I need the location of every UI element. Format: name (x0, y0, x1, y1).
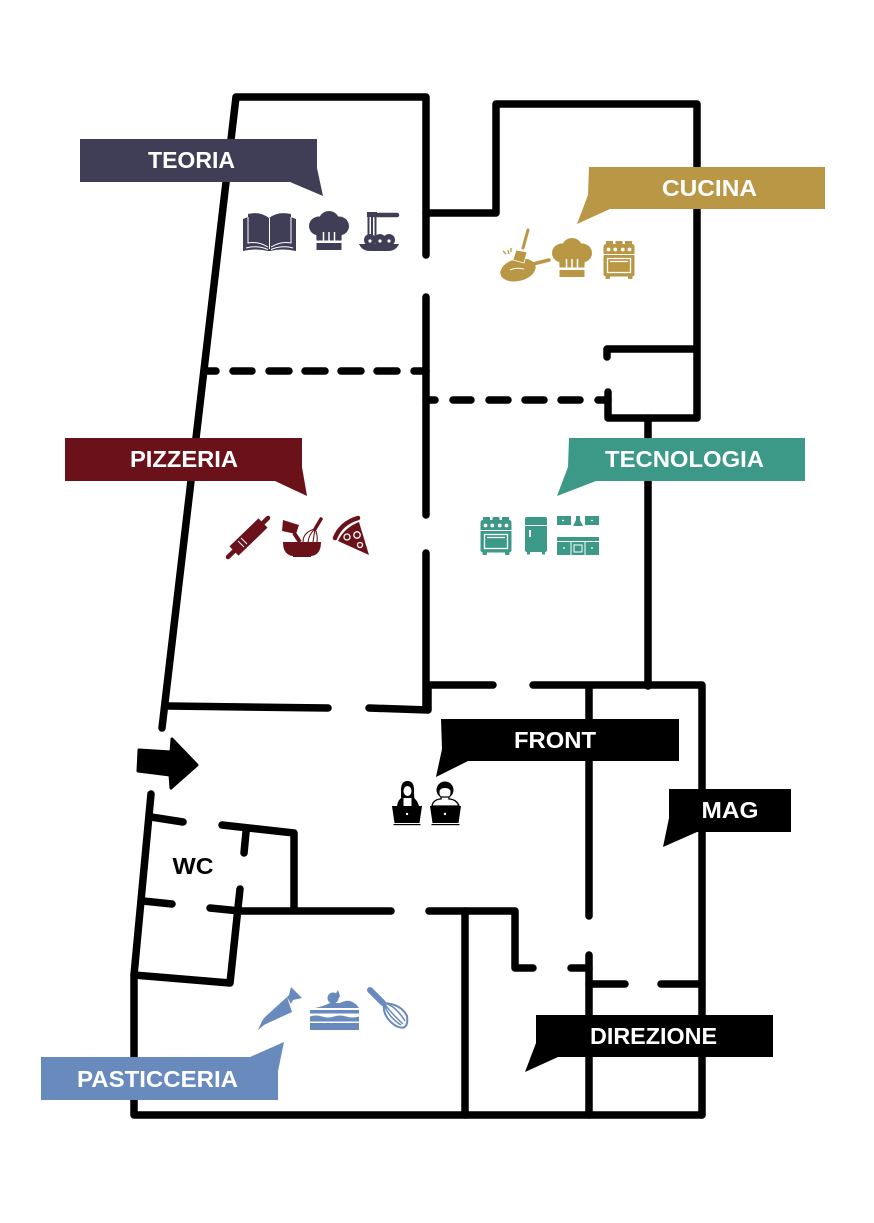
icon: man with headset at laptop (430, 782, 461, 825)
icons: pasticceria (258, 987, 407, 1030)
panel: MAG (663, 789, 791, 847)
icons: front desk staff (392, 781, 461, 825)
icon: cake slice (310, 990, 359, 1030)
panel: PASTICCERIA (41, 1042, 284, 1100)
heading: DIREZIONE: DIREZIONE (590, 1023, 717, 1049)
arrow: entrance (138, 739, 197, 788)
icon: frying pan (498, 230, 549, 285)
panel: CUCINA (577, 167, 825, 224)
panel: TECNOLOGIA (557, 438, 805, 496)
icon: book (243, 213, 296, 251)
icon: piping bag (258, 987, 302, 1030)
icon: oven (480, 517, 512, 555)
heading: MAG: MAG (702, 797, 758, 823)
panel: DIREZIONE (525, 1015, 773, 1072)
panel: FRONT (436, 719, 679, 777)
panel: TEORIA (80, 139, 323, 196)
icon: pizza slice (335, 518, 369, 555)
icon: chef hat (309, 211, 349, 250)
heading: PASTICCERIA: PASTICCERIA (77, 1066, 238, 1092)
label: WC: WC (172, 853, 214, 879)
heading: TEORIA: TEORIA (148, 147, 235, 173)
icon: woman at laptop (392, 781, 422, 825)
floor plan walls (134, 97, 702, 1115)
icon: chef hat (552, 238, 592, 277)
icon: fridge (525, 517, 547, 554)
icon: whisk (370, 990, 407, 1028)
heading: TECNOLOGIA: TECNOLOGIA (605, 446, 764, 472)
icon: kitchen (557, 516, 599, 555)
icon: rolling pin (228, 518, 268, 557)
icon: mixing bowl (282, 519, 321, 557)
icons: pizzeria (228, 518, 369, 557)
icons: cucina (498, 230, 634, 285)
icon: spaghetti (359, 212, 399, 251)
heading: PIZZERIA: PIZZERIA (130, 446, 238, 472)
panel: PIZZERIA (65, 438, 307, 496)
icon: oven (604, 241, 634, 279)
icons: teoria (243, 211, 399, 251)
heading: CUCINA: CUCINA (662, 175, 757, 201)
icons: tecnologia (480, 516, 599, 555)
heading: FRONT: FRONT (514, 727, 596, 753)
